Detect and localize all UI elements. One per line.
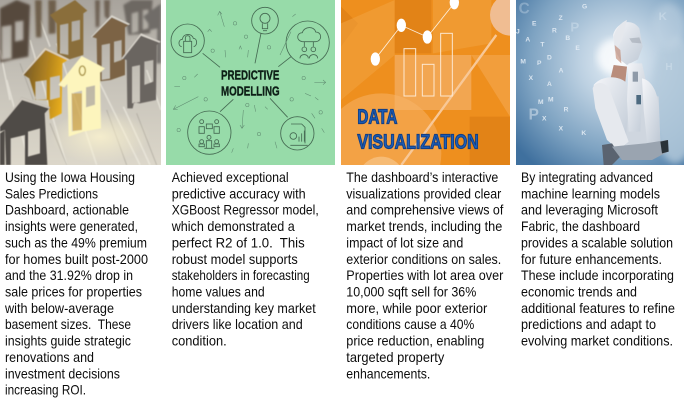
text block: housing insights <box>4 170 148 398</box>
text block: predictive modelling <box>171 170 319 349</box>
text block: data visualization: market trends, including the <box>346 219 502 234</box>
text block: data visualization: more, while poor exterior <box>346 301 488 316</box>
image: orange data visualization graphic <box>341 0 510 165</box>
text block: data visualization: conditions cause a 40% <box>346 317 474 332</box>
gold house top <box>50 0 87 59</box>
text block: future enhancements: and leveraging Microsoft <box>521 203 658 218</box>
text block: data visualization: and comprehensive views of <box>346 203 503 218</box>
text block: data visualization: enhancements. <box>346 366 430 381</box>
floating letters: R <box>552 28 557 35</box>
floating letters: Z <box>559 15 563 22</box>
text block: data visualization: exterior conditions on sales. <box>346 252 501 267</box>
floating letters: B <box>565 35 570 42</box>
image: miniature houses with one glowing house <box>0 0 161 165</box>
text block: housing insights: with below-average <box>4 301 114 316</box>
text block: predictive modelling: Achieved exceptional <box>172 170 289 185</box>
text block: housing insights: such as the 49% premium <box>5 235 147 250</box>
text block: predictive modelling: condition. <box>172 334 227 349</box>
text block: future enhancements: additional features to refine <box>521 301 675 316</box>
text block: future enhancements: machine learning models <box>521 186 660 201</box>
floating letters: X <box>529 75 534 82</box>
bright centre house <box>58 56 105 137</box>
floating letters <box>516 0 673 137</box>
floating letters: K <box>581 130 586 137</box>
floating letters: D <box>547 54 552 61</box>
text block: data visualization: 10,000 sqft sell for 36% <box>346 284 476 300</box>
floating letters: A <box>559 68 564 75</box>
image: humanoid robot thinking among letters <box>516 0 684 165</box>
floating letters: E <box>575 45 580 52</box>
text block: housing insights: sale prices for properties <box>5 284 142 300</box>
panel: predictive modelling <box>166 0 335 349</box>
brown house mid right <box>91 15 130 82</box>
text block: future enhancements <box>521 170 675 349</box>
icon: cloud lock <box>171 24 204 57</box>
floating letters: K <box>659 11 668 23</box>
panel: future enhancements <box>516 0 684 349</box>
text block: housing insights: insights guide strategic <box>5 334 131 349</box>
text block: data visualization: The dashboard’s interactive <box>346 170 498 185</box>
floating letters: P <box>570 20 579 35</box>
text block: housing insights: for homes built post-2000 <box>5 252 148 267</box>
text block: housing insights: and the 31.92% drop in <box>5 268 133 283</box>
icon: people network <box>188 111 231 154</box>
text block: predictive modelling: robust model supports <box>172 252 298 267</box>
floating letters: X <box>542 116 547 123</box>
icon: light bulb <box>252 7 278 34</box>
floating letters: M <box>548 97 554 104</box>
text block: housing insights: Dashboard, actionable <box>5 203 129 218</box>
text block: housing insights: renovations and <box>5 350 94 365</box>
title: data visualization <box>357 105 479 153</box>
grey house right <box>122 33 161 108</box>
icon: document with gear and chart <box>281 117 314 150</box>
text block: future enhancements: Fabric, the dashboard <box>521 219 640 234</box>
text block: housing insights: Sales Predictions <box>5 186 98 201</box>
floating letters: T <box>540 42 544 49</box>
back row of blurred houses <box>0 0 161 63</box>
image: predictive modelling diagram <box>166 0 335 165</box>
floating letters: M <box>538 99 544 106</box>
bar chart <box>404 33 452 96</box>
text block: predictive modelling: perfect R2 of 1.0. This <box>172 235 305 250</box>
title: data visualization: DATA <box>357 105 397 128</box>
text block: predictive modelling: drivers like location and <box>172 317 303 332</box>
icon: cloud with people <box>286 21 329 64</box>
text block: housing insights: basement sizes. These <box>5 317 131 332</box>
floating letters: M <box>520 58 526 65</box>
title: predictive modelling <box>221 67 280 98</box>
floating letters: C <box>519 0 530 17</box>
text block: future enhancements: By integrating advanced <box>521 170 653 185</box>
text block: housing insights: investment decisions <box>5 366 120 381</box>
floating letters: H <box>665 62 673 73</box>
text block: future enhancements: predictions and adapt to <box>521 317 656 332</box>
text block: housing insights: insights were generated, <box>5 219 138 234</box>
text block: future enhancements: evolving market conditions. <box>521 334 673 349</box>
title: data visualization: VISUALIZATION <box>357 130 479 153</box>
floating letters: A <box>547 81 552 88</box>
text block: future enhancements: for future enhancements. <box>521 252 662 267</box>
text block: predictive modelling: home values and <box>172 284 265 300</box>
title: predictive modelling: MODELLING <box>221 83 280 98</box>
text block: data visualization: visualizations provided clear <box>346 186 502 201</box>
floating letters: G <box>582 3 587 10</box>
floating letters: P <box>529 106 539 123</box>
text block: predictive modelling: which demonstrated a <box>171 219 295 234</box>
text block: future enhancements: These include incorporating <box>521 268 674 283</box>
text block: predictive modelling: predictive accuracy with <box>172 186 306 201</box>
golden house mid left <box>22 48 69 119</box>
text block: future enhancements: economic trends and <box>521 284 637 300</box>
floating letters: X <box>559 126 564 133</box>
text block: housing insights: Using the Iowa Housing <box>5 170 135 185</box>
text block: predictive modelling: understanding key market <box>172 301 316 316</box>
floating letters: A <box>525 37 530 44</box>
panel: data visualization <box>341 0 510 381</box>
floating letters: J <box>516 28 520 35</box>
text block: data visualization: targeted property <box>346 350 444 365</box>
text block: data visualization: impact of lot size and <box>346 235 463 250</box>
floating letters: R <box>564 107 569 114</box>
grey house bottom left <box>0 97 50 165</box>
text block: predictive modelling: stakeholders in forecasting <box>172 268 310 283</box>
line chart <box>371 0 459 66</box>
text block: future enhancements: provides a scalable solution <box>521 235 673 250</box>
floating letters: P <box>537 60 542 67</box>
robot <box>593 20 669 165</box>
text block: data visualization: Properties with lot area over <box>346 268 504 283</box>
title: predictive modelling: PREDICTIVE <box>221 67 279 82</box>
panel: housing insights <box>0 0 161 398</box>
connector lines <box>203 33 291 117</box>
text block: data visualization: price reduction, enabling <box>346 334 484 349</box>
text block: predictive modelling: XGBoost Regressor model, <box>172 203 319 218</box>
text block: housing insights: increasing ROI. <box>5 383 86 398</box>
text block: data visualization <box>346 170 504 381</box>
floating letters: E <box>532 20 537 27</box>
